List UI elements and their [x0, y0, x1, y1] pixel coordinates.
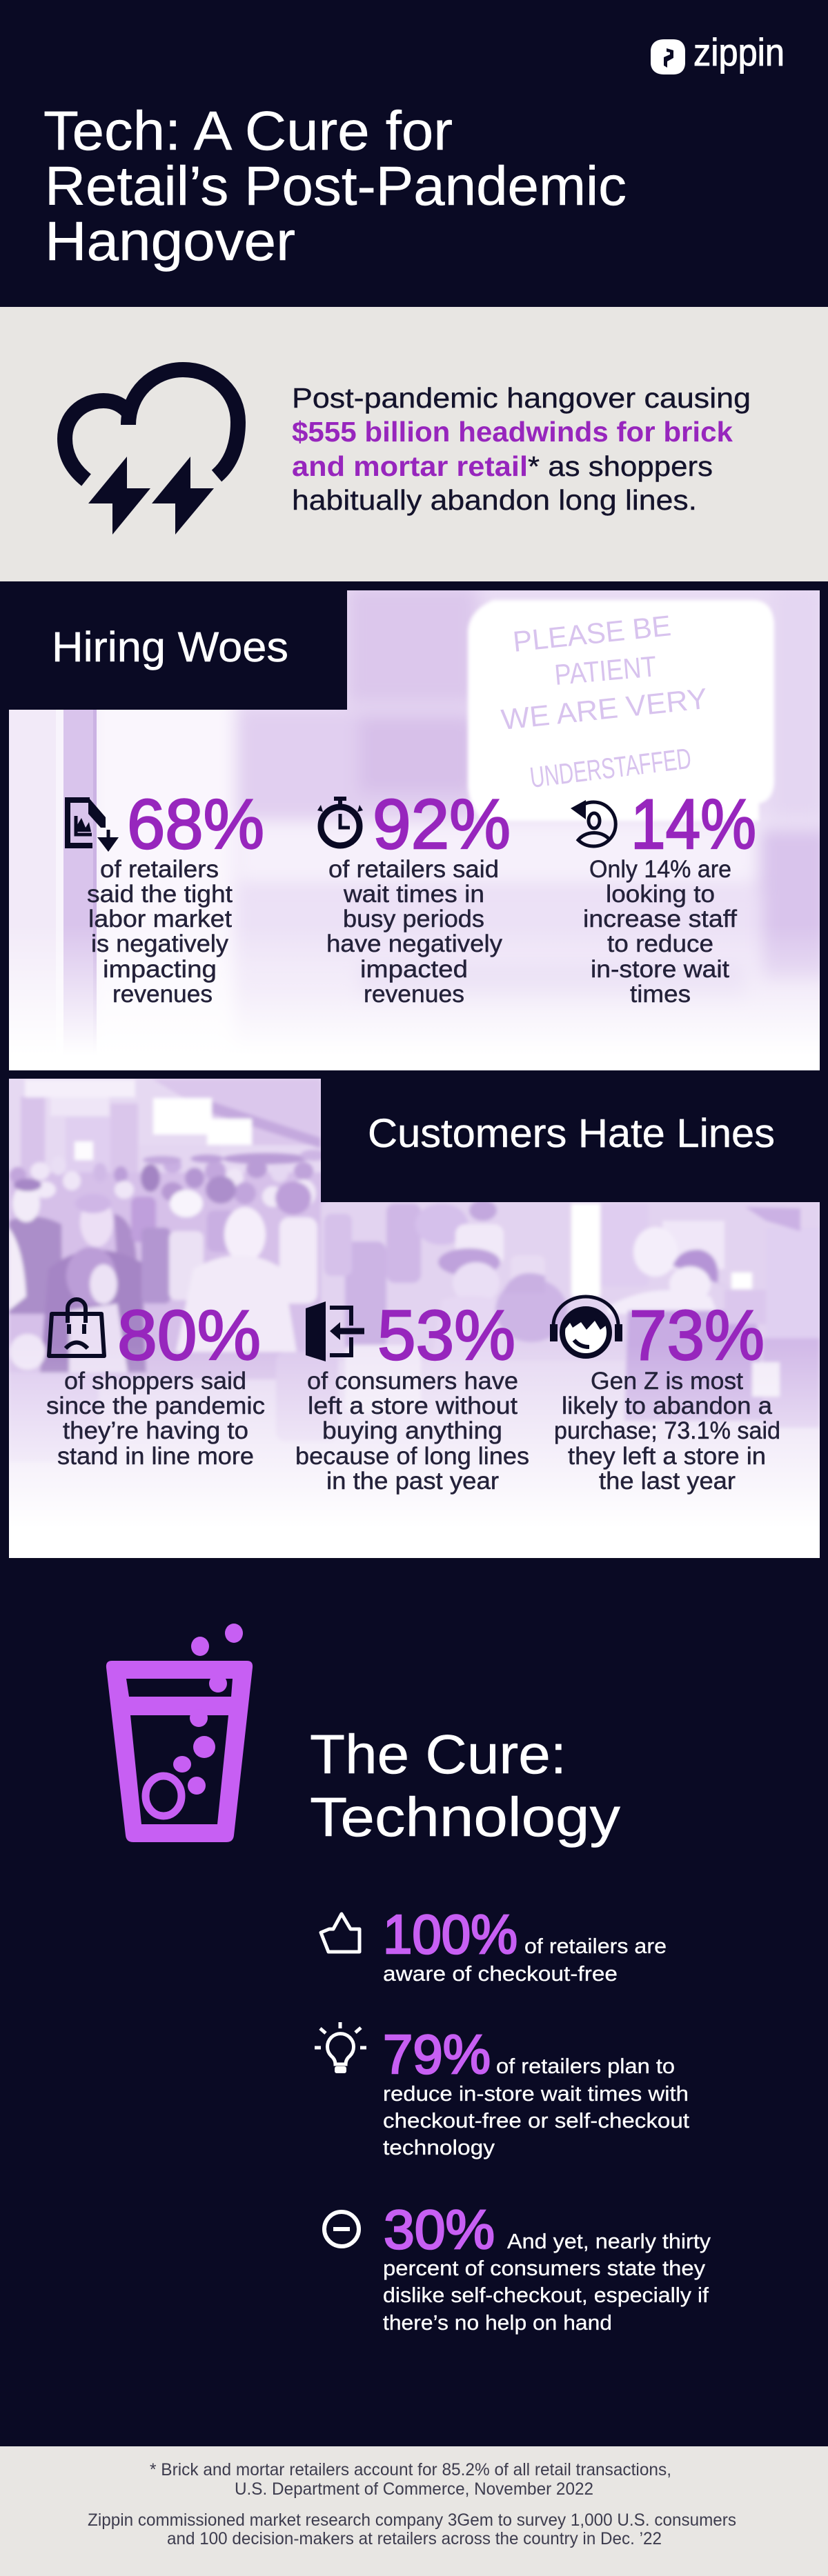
- stat: 30%: dislike self-checkout, especially if: [383, 2283, 709, 2307]
- stat: 79%: technology: [383, 2135, 495, 2159]
- stat: 80%: of shoppers said: [64, 1368, 246, 1395]
- stat: 53%: because of long lines: [295, 1443, 529, 1470]
- stat: 68%: revenues: [112, 981, 213, 1008]
- stat: 100%: of retailers are: [524, 1934, 667, 1958]
- stat: 79%: [315, 2022, 689, 2159]
- stat: 68%: of retailers: [100, 856, 219, 883]
- stat: 14%: increase staff: [583, 906, 737, 932]
- stat: 30%: 30%: [384, 2199, 495, 2260]
- stat: 14%: looking to: [606, 881, 715, 908]
- stat: 92%: wait times in: [343, 881, 484, 908]
- panel: customers hate lines photo: [9, 1079, 820, 1558]
- stat: 73%: [550, 1296, 780, 1495]
- icon: head with headphones: [550, 1297, 622, 1356]
- icon: fizzing glass: [106, 1624, 253, 1842]
- title: Retail’s Post-Pandemic: [45, 155, 627, 217]
- stat: 79%: checkout-free or self-checkout: [383, 2108, 689, 2133]
- panel: footer sources: and 100 decision-makers at retailers across the country in Dec. ’22: [167, 2529, 662, 2548]
- woman and jacket: [40, 1250, 146, 1372]
- stat: 79%: 79%: [383, 2024, 491, 2085]
- stat: 79%: of retailers plan to: [496, 2054, 675, 2078]
- icon: sad shopping bag: [49, 1299, 104, 1356]
- icon: storm cloud: [65, 370, 238, 535]
- icon: minus circle: [324, 2212, 359, 2246]
- stat: 100%: 100%: [383, 1904, 518, 1965]
- plaid and shirts: [141, 1228, 170, 1304]
- stat: 68%: [68, 785, 264, 1008]
- crowd heads, back row: [10, 1167, 26, 1184]
- stat: 53%: buying anything: [322, 1417, 502, 1444]
- title: Hangover: [45, 210, 295, 272]
- title: Tech: A Cure for: [43, 100, 453, 161]
- headline text: habitually abandon long lines.: [292, 484, 697, 516]
- panel tab: customers hate lines heading: [321, 1071, 828, 1202]
- stat: 92%: impacted: [360, 956, 468, 983]
- icon: stopwatch: [317, 797, 363, 846]
- stat: 30%: percent of consumers state they: [383, 2256, 706, 2280]
- man with glasses: [79, 1207, 115, 1248]
- stat: 92%: [317, 785, 511, 1008]
- stat: 68%: 68%: [127, 785, 264, 863]
- stat: 53%: of consumers have: [307, 1368, 518, 1395]
- panel: footer sources: [0, 2446, 828, 2576]
- stat: 80%: [46, 1296, 265, 1470]
- stat: 68%: impacting: [103, 956, 217, 983]
- panel: headline band: [0, 307, 828, 581]
- stat: 73%: they left a store in: [568, 1443, 766, 1470]
- panel: footer sources: Zippin commissioned market research company 3Gem to survey 1,000 U.S. consumers: [88, 2510, 736, 2530]
- stat: 100%: aware of checkout-free: [383, 1961, 618, 1986]
- icon: thumbs up: [321, 1914, 359, 1952]
- stat: 30%: [324, 2199, 711, 2335]
- stat: 73%: the last year: [599, 1468, 736, 1495]
- sign in photo: PATIENT: [553, 650, 658, 691]
- stat: 14%: [571, 785, 756, 1008]
- stat: 73%: likely to abandon a: [562, 1392, 773, 1419]
- icon: door exit: [306, 1301, 364, 1361]
- icon: light bulb: [315, 2022, 366, 2073]
- stat: 30%: there’s no help on hand: [383, 2310, 612, 2335]
- panel tab: customers hate lines heading: Customers Hate Lines: [368, 1111, 775, 1156]
- stat: 14%: times: [630, 981, 691, 1008]
- sign in photo: PLEASE BE: [511, 609, 673, 658]
- sign in photo: UNDERSTAFFED: [528, 742, 693, 794]
- stat: 100%: [321, 1904, 667, 1986]
- stat: 53%: in the past year: [326, 1468, 499, 1495]
- stat: 92%: busy periods: [343, 906, 484, 932]
- panel tab: hiring woes heading: [0, 582, 347, 710]
- panel tab: hiring woes heading: Hiring Woes: [52, 623, 288, 670]
- heading: the cure: The Cure:: [310, 1724, 566, 1785]
- heading: the cure: [310, 1724, 620, 1848]
- stat: 14%: in-store wait: [591, 956, 729, 983]
- stat: 68%: labor market: [88, 906, 232, 932]
- headline text: Post-pandemic hangover causing: [292, 382, 751, 414]
- icon: document chart down: [68, 797, 119, 852]
- sign in photo: WE ARE VERY: [500, 682, 709, 736]
- stat: 68%: is negatively: [91, 930, 229, 957]
- stat: 80%: 80%: [117, 1296, 261, 1375]
- panel: footer sources: U.S. Department of Commerce, November 2022: [235, 2479, 593, 2499]
- stat: 14%: 14%: [631, 785, 756, 863]
- stat: 14%: to reduce: [607, 930, 713, 957]
- panel: footer sources: * Brick and mortar retailers account for 85.2% of all retail transactions,: [150, 2460, 671, 2479]
- stat: 73%: 73%: [629, 1296, 765, 1375]
- headline text: * as shoppers: [528, 450, 713, 482]
- stat: 79%: reduce in-store wait times with: [383, 2081, 689, 2106]
- stat: 73%: purchase; 73.1% said: [554, 1417, 780, 1444]
- front left man and shirt: [9, 1217, 62, 1314]
- stat: 80%: stand in line more: [57, 1443, 254, 1470]
- stat: 53%: left a store without: [308, 1392, 518, 1419]
- right side crowd: [345, 1241, 386, 1352]
- logo: zippin: [693, 30, 785, 74]
- stat: 53%: 53%: [377, 1296, 515, 1375]
- heading: the cure: Technology: [310, 1786, 620, 1848]
- stat: 68%: said the tight: [87, 881, 233, 908]
- stat: 92%: revenues: [364, 981, 464, 1008]
- logo: [651, 30, 785, 74]
- headline text: $555 billion headwinds for brick: [292, 416, 733, 448]
- stat: 92%: of retailers said: [328, 856, 499, 883]
- stat: 80%: they’re having to: [63, 1417, 248, 1444]
- headline text: [292, 382, 751, 516]
- stat: 80%: since the pandemic: [46, 1392, 265, 1419]
- panel: hiring woes photo: [9, 586, 828, 1076]
- stat: 30%: And yet, nearly thirty: [507, 2229, 711, 2253]
- title: [43, 100, 627, 272]
- stat: 92%: have negatively: [326, 930, 503, 957]
- icon: rotating person: [571, 800, 615, 846]
- sign in photo: [468, 600, 774, 821]
- stat: 73%: Gen Z is most: [591, 1368, 743, 1395]
- stat: 92%: 92%: [373, 785, 511, 863]
- stat: 53%: [295, 1296, 529, 1495]
- bald man: [224, 1207, 266, 1262]
- stat: 14%: Only 14% are: [589, 856, 731, 883]
- headline text: and mortar retail: [292, 450, 528, 482]
